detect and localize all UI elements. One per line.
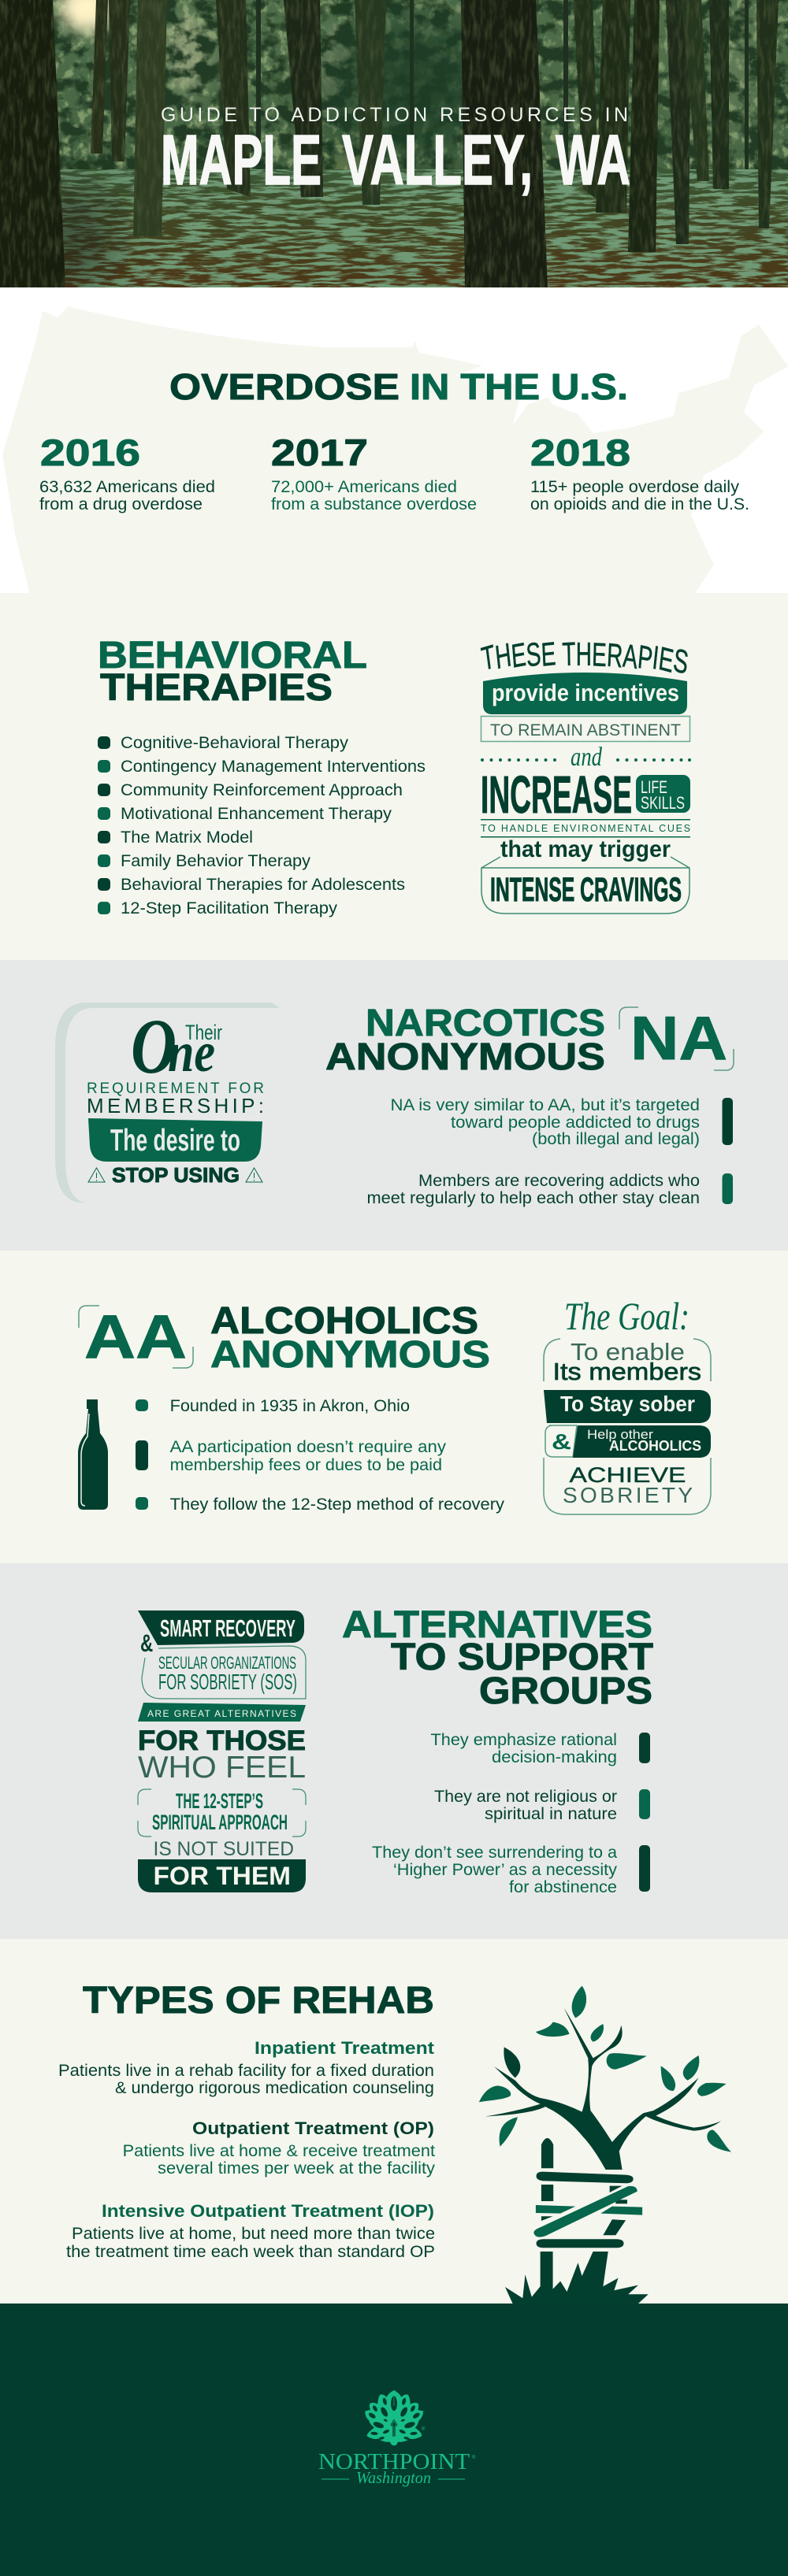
callout: smart recovery and SOS xyxy=(138,1610,306,1892)
stat 2016 xyxy=(39,432,215,513)
point: NA is similar to AA: NA is very similar to AA, but it’s targeted xyxy=(391,1096,700,1114)
heading: behavioral therapies: THERAPIES xyxy=(100,667,333,709)
heading: alternatives to support groups xyxy=(342,1604,653,1712)
callout: the goal: Its members xyxy=(553,1358,701,1385)
card: one requirement: REQUIREMENT FOR xyxy=(87,1080,264,1097)
heading: alcoholics anonymous: ANONYMOUS xyxy=(210,1334,490,1376)
heading: alcoholics anonymous xyxy=(79,1300,490,1376)
outpatient treatment xyxy=(123,2118,436,2178)
point: not religious xyxy=(434,1788,650,1823)
panel: behavioral therapies xyxy=(0,593,788,961)
panel: overdose in the U.S. xyxy=(0,287,788,595)
list: AA facts: They follow the 12-Step method of recovery xyxy=(170,1496,505,1514)
callout: the goal: To enable xyxy=(571,1338,685,1366)
icon: bottle xyxy=(78,1399,108,1510)
callout: the goal: ALCOHOLICS xyxy=(609,1438,701,1454)
point: rational decision-making: decision-making xyxy=(492,1748,617,1766)
outpatient treatment: several times per week at the facility xyxy=(158,2159,436,2178)
point: NA is similar to AA: (both illegal and legal) xyxy=(532,1130,700,1148)
callout: smart recovery and SOS: IS NOT SUITED xyxy=(153,1838,294,1860)
heading: narcotics anonymous: ANONYMOUS xyxy=(325,1036,605,1078)
inpatient treatment: & undergo rigorous medication counseling xyxy=(115,2079,434,2097)
typographic callout: these therapies: provide incentives xyxy=(492,679,679,706)
point: NA is similar to AA xyxy=(391,1096,733,1148)
heading: behavioral therapies: BEHAVIORAL xyxy=(98,635,367,676)
map of United States xyxy=(2,306,788,595)
heading: alternatives to support groups: TO SUPPORT xyxy=(391,1636,653,1678)
heading: alternatives to support groups: GROUPS xyxy=(479,1670,652,1712)
typographic callout: these therapies: THESE THERAPIES xyxy=(479,635,690,682)
list: AA facts: membership fees or dues to be paid xyxy=(170,1456,442,1474)
card: one requirement: The desire to xyxy=(110,1124,240,1158)
panel: narcotics anonymous xyxy=(0,960,788,1251)
point: members are recovering addicts: Members are recovering addicts who xyxy=(418,1172,700,1190)
list of therapies: Cognitive-Behavioral Therapy xyxy=(121,734,349,752)
callout: smart recovery and SOS: SPIRITUAL APPROACH xyxy=(152,1811,288,1834)
point: higher power xyxy=(372,1844,650,1896)
list of therapies: Contingency Management Interventions xyxy=(121,758,426,776)
intensive outpatient treatment xyxy=(66,2201,435,2261)
outpatient treatment: Patients live at home & receive treatment xyxy=(123,2142,435,2160)
heading: alternatives to support groups: ALTERNATIVES xyxy=(342,1604,652,1646)
typographic callout: these therapies: LIFE xyxy=(641,777,667,797)
stat 2017: from a substance overdose xyxy=(271,495,477,513)
stat 2018: 115+ people overdose daily xyxy=(530,478,740,496)
callout: the goal: & xyxy=(552,1429,571,1454)
logo wordmark: northpoint washington: Washington xyxy=(356,2468,431,2487)
stat 2018: 2018 xyxy=(530,432,630,473)
heading: alcoholics anonymous: AA xyxy=(84,1302,187,1371)
list of therapies: Family Behavior Therapy xyxy=(121,852,311,870)
icon: warning triangles xyxy=(88,1168,262,1182)
callout: the goal: ACHIEVE xyxy=(569,1463,686,1487)
heading: narcotics anonymous xyxy=(325,1003,734,1078)
logo wordmark: northpoint washington xyxy=(318,2426,476,2487)
point: rational decision-making xyxy=(430,1731,650,1766)
stat 2016: 2016 xyxy=(40,432,140,473)
point: members are recovering addicts xyxy=(367,1172,733,1207)
list of therapies: 12-Step Facilitation Therapy xyxy=(121,899,338,917)
callout: smart recovery and SOS: ARE GREAT ALTERNATIVES xyxy=(147,1708,296,1719)
list of therapies: The Matrix Model xyxy=(121,828,253,847)
stat 2018 xyxy=(530,432,749,513)
callout: the goal xyxy=(544,1294,711,1514)
card: one requirement: STOP USING xyxy=(112,1163,240,1187)
logo: peacock xyxy=(365,2390,423,2445)
panel: alternatives to support groups xyxy=(0,1563,788,1940)
point: rational decision-making: They emphasize rational xyxy=(430,1731,617,1749)
card: one requirement: ne xyxy=(168,1021,215,1084)
callout: smart recovery and SOS: & xyxy=(140,1629,153,1657)
list of therapies xyxy=(98,734,426,917)
card: one requirement: Their xyxy=(185,1021,222,1044)
callout: smart recovery and SOS: FOR THEM xyxy=(153,1862,291,1890)
panel: types of rehab xyxy=(0,1939,788,2304)
card: one requirement: MEMBERSHIP: xyxy=(87,1094,264,1118)
intensive outpatient treatment: Patients live at home, but need more than twice xyxy=(72,2225,435,2243)
outpatient treatment: Outpatient Treatment (OP) xyxy=(192,2118,434,2138)
logo wordmark: northpoint washington: ® xyxy=(472,2455,476,2460)
heading: alcoholics anonymous: ALCOHOLICS xyxy=(210,1300,478,1342)
callout: the goal: Help other xyxy=(587,1427,653,1442)
stat 2017: 72,000+ Americans died xyxy=(271,478,457,496)
heading: narcotics anonymous: NA xyxy=(630,1003,727,1073)
heading: types of rehab: TYPES OF REHAB xyxy=(83,1980,434,2022)
typographic callout: these therapies: that may trigger xyxy=(500,836,671,862)
typographic callout: these therapies: TO HANDLE ENVIRONMENTAL CUES xyxy=(481,823,690,834)
heading: overdose: OVERDOSE xyxy=(169,366,400,407)
icon: splinted tree xyxy=(479,1986,731,2304)
title: WA xyxy=(556,121,630,200)
typographic callout: these therapies: TO REMAIN ABSTINENT xyxy=(490,721,681,739)
card: one requirement xyxy=(55,1003,281,1203)
point: NA is similar to AA: toward people addicted to drugs xyxy=(451,1114,700,1132)
logo wordmark: northpoint washington: ® xyxy=(422,2426,426,2432)
heading: narcotics anonymous: NARCOTICS xyxy=(366,1003,605,1044)
callout: smart recovery and SOS: THE 12-STEP’S xyxy=(176,1789,263,1813)
stat 2016: from a drug overdose xyxy=(39,495,203,513)
inpatient treatment: Patients live in a rehab facility for a fixed duration xyxy=(58,2062,434,2080)
heading: behavioral therapies xyxy=(98,635,367,709)
title: GUIDE TO ADDICTION RESOURCES IN xyxy=(161,104,628,126)
panel: footer xyxy=(0,2304,788,2576)
callout: smart recovery and SOS: SECULAR ORGANIZATIONS xyxy=(158,1653,296,1673)
logo wordmark: northpoint washington: NORTHPOINT xyxy=(318,2449,470,2474)
title: VALLEY, xyxy=(342,121,533,200)
title: MAPLE xyxy=(161,121,322,200)
stat 2017 xyxy=(271,432,477,513)
inpatient treatment: Inpatient Treatment xyxy=(255,2038,435,2058)
point: members are recovering addicts: meet regularly to help each other stay clean xyxy=(367,1189,700,1207)
list: AA facts: AA participation doesn’t require any xyxy=(170,1438,447,1456)
card: one requirement: O xyxy=(131,1003,177,1090)
title xyxy=(161,104,630,200)
stat 2018: on opioids and die in the U.S. xyxy=(530,495,749,513)
stat 2016: 63,632 Americans died xyxy=(39,478,215,496)
point: higher power: ‘Higher Power’ as a necessity xyxy=(393,1861,618,1879)
stat 2017: 2017 xyxy=(271,432,368,473)
list of therapies: Community Reinforcement Approach xyxy=(121,781,403,799)
point: not religious: spiritual in nature xyxy=(485,1805,617,1823)
typographic callout: these therapies xyxy=(479,635,691,914)
callout: the goal: SOBRIETY xyxy=(563,1483,693,1507)
typographic callout: these therapies: SKILLS xyxy=(641,793,685,813)
callout: the goal: To Stay sober xyxy=(560,1392,695,1416)
intensive outpatient treatment: Intensive Outpatient Treatment (IOP) xyxy=(102,2201,434,2221)
inpatient treatment xyxy=(58,2038,435,2097)
heading: overdose xyxy=(169,366,628,407)
point: not religious: They are not religious or xyxy=(434,1788,617,1806)
panel: alcoholics anonymous xyxy=(0,1251,788,1564)
callout: smart recovery and SOS: FOR THOSE xyxy=(138,1725,306,1756)
callout: smart recovery and SOS: SMART RECOVERY xyxy=(160,1614,296,1642)
list of therapies: Motivational Enhancement Therapy xyxy=(121,805,392,823)
list: AA facts: Founded in 1935 in Akron, Ohio xyxy=(170,1397,410,1415)
list of therapies: Behavioral Therapies for Adolescents xyxy=(121,876,405,894)
point: higher power: They don’t see surrendering to a xyxy=(372,1844,617,1862)
typographic callout: these therapies: and xyxy=(571,743,603,772)
typographic callout: these therapies: INCREASE xyxy=(481,765,632,825)
callout: the goal: The Goal: xyxy=(564,1294,690,1338)
callout: smart recovery and SOS: WHO FEEL xyxy=(138,1751,306,1785)
callout: smart recovery and SOS: FOR SOBRIETY (SOS) xyxy=(158,1670,297,1694)
list: AA facts xyxy=(136,1397,505,1514)
panel: forest hero banner xyxy=(0,0,788,291)
point: higher power: for abstinence xyxy=(509,1878,617,1896)
intensive outpatient treatment: the treatment time each week than standard OP xyxy=(66,2243,435,2261)
heading: overdose: IN THE U.S. xyxy=(410,366,628,407)
